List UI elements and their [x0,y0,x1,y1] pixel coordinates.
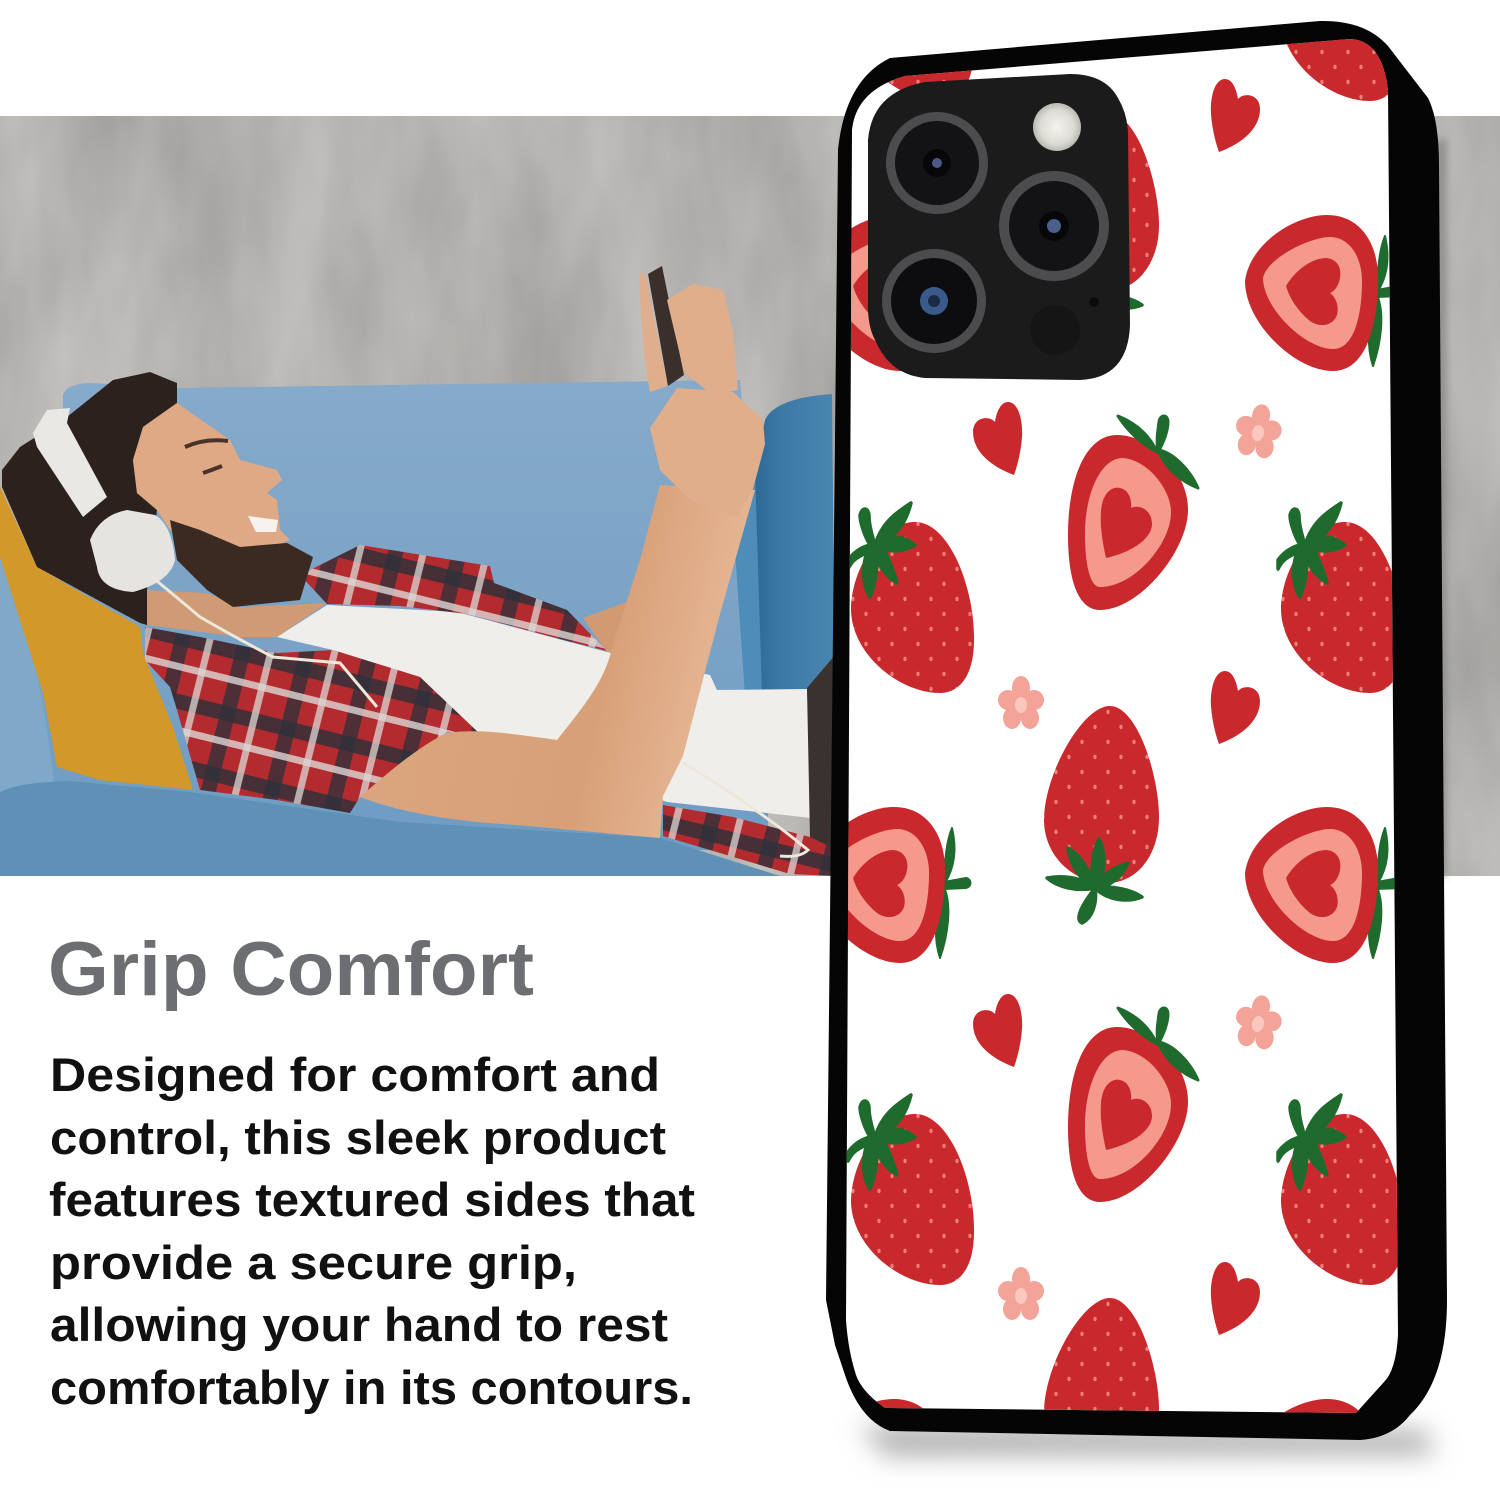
title: Grip Comfort [48,927,534,1012]
microphone dot [1089,297,1099,307]
sensor [1030,305,1080,355]
body text: allowing your hand to rest [50,1298,668,1351]
lens right [999,171,1109,281]
phone screen with strawberry pattern [846,39,1398,1413]
lifestyle photo: man on sofa with phone [0,266,835,878]
yellow pillow [0,487,193,790]
phone shadow [860,1425,1435,1456]
plaid shirt hem [663,805,835,876]
phone in hand [648,266,684,386]
body text: control, this sleek product [50,1111,666,1164]
whole strawberries [848,0,1404,1500]
lens bottom left [882,249,986,353]
ear cup [90,510,175,592]
hearts [973,79,1260,1335]
lens top left [886,112,988,214]
flowers [998,400,1286,1320]
right edge shadow [1436,140,1446,876]
camera housing [868,74,1130,380]
hair [2,372,177,625]
neck [147,590,327,637]
fingers and fist [650,284,765,517]
camera module [868,74,1130,380]
smile [248,516,278,532]
sliced strawberries [812,215,1404,1500]
body text: provide a secure grip, [50,1236,577,1289]
sofa [0,380,835,878]
body text: features textured sides that [49,1173,695,1226]
back of hand [640,273,668,392]
headphones [33,408,808,856]
flash [1033,103,1081,151]
white t-shirt [277,605,811,818]
plaid collar [300,545,607,651]
concrete wall band [0,116,1500,876]
arm [360,485,755,838]
headband [33,408,107,517]
phone case body [826,21,1447,1440]
body text [49,1048,695,1414]
body text: Designed for comfort and [50,1048,660,1101]
trousers [807,655,835,850]
cable [152,577,808,856]
screen background [840,30,1410,1420]
beard [170,520,313,607]
plaid sleeve [145,627,480,813]
face [133,403,290,560]
far arm [583,602,627,653]
body text: comfortably in its contours. [50,1361,693,1414]
eyebrow and eye [185,440,228,473]
